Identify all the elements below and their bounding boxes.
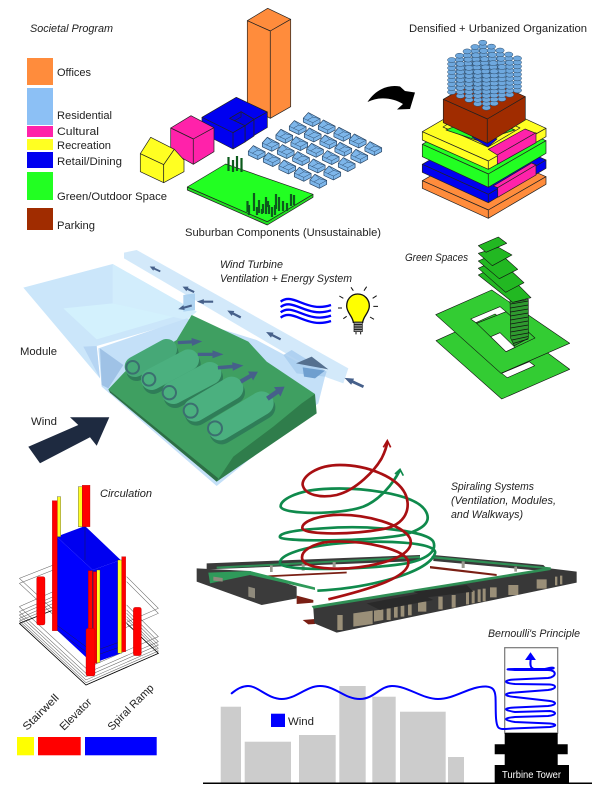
- label: stairwell: Stairwell: [21, 692, 62, 733]
- chart: bernoulli diagram: [203, 648, 592, 783]
- intake arrow: [343, 375, 365, 390]
- label: elevator: Elevator: [58, 696, 95, 733]
- orange layer: [422, 147, 546, 218]
- heading: spiraling systems: (Ventilation, Modules,: [451, 495, 556, 507]
- heading: spiraling systems: Spiraling Systems: [451, 481, 534, 493]
- icon: wind waves: [281, 299, 331, 323]
- arrow: wind: [28, 417, 109, 463]
- retail block: [202, 97, 267, 149]
- legend item: cultural: Cultural: [57, 126, 99, 138]
- legend item: offices: Offices: [57, 67, 91, 79]
- diagram: suburban components: [140, 8, 382, 225]
- diagram: green spaces: [436, 237, 570, 399]
- turbine vent: [296, 357, 328, 378]
- labels: circulation key: [17, 682, 157, 755]
- heading: densified organization: Densified + Urbanized Organization: [409, 23, 587, 35]
- heading: wind turbine: Wind Turbine: [220, 259, 283, 271]
- heading: green spaces: Green Spaces: [405, 252, 468, 264]
- ventilation duct: [124, 250, 348, 383]
- yellow and magenta layer: [422, 98, 546, 169]
- lower plane: [436, 314, 570, 399]
- duct arrows: [149, 264, 282, 342]
- city buildings: [221, 686, 464, 783]
- legend item: residential: [27, 88, 112, 125]
- legend item: green/outdoor space: Green/Outdoor Space: [57, 191, 167, 203]
- legend item: parking: Parking: [57, 220, 95, 232]
- legend item: retail/dining: Retail/Dining: [57, 156, 122, 168]
- legend: societal program: [27, 58, 167, 232]
- ground line: [203, 782, 592, 784]
- left wing: [197, 568, 315, 605]
- green space plane: [187, 164, 313, 225]
- diagram: spiraling systems: [197, 441, 577, 633]
- floor plates: [19, 565, 158, 685]
- turbine rollers: [126, 349, 263, 435]
- diagram: densified stack: [422, 40, 546, 218]
- legend item: residential: Residential: [57, 110, 112, 122]
- heading: societal program: Societal Program: [30, 23, 113, 35]
- wind legend: [271, 714, 314, 728]
- diagram: circulation: [19, 485, 158, 685]
- elevators: [37, 485, 141, 676]
- label: wind: Wind: [31, 416, 57, 428]
- stairwells: [57, 487, 122, 663]
- module shell: [23, 264, 325, 486]
- heading: spiraling systems: [451, 481, 556, 521]
- legend item: offices: [27, 58, 91, 85]
- legend item: recreation: [27, 139, 111, 152]
- back wings: [207, 555, 551, 577]
- walkway segments: [297, 596, 315, 624]
- front wing: [312, 567, 577, 633]
- upper plane: [436, 290, 570, 373]
- heading: spiraling systems: and Walkways): [451, 509, 523, 521]
- heading: wind turbine: Ventilation + Energy System: [220, 273, 352, 285]
- suburban houses: [248, 113, 382, 188]
- legend item: parking: [27, 208, 95, 232]
- label: spiral ramp: Spiral Ramp: [106, 682, 157, 733]
- parking block: [443, 77, 525, 143]
- caption: suburban components: Suburban Components (Unsustainable): [185, 227, 381, 239]
- arrow: curved black: [368, 86, 415, 110]
- green layer: [422, 111, 546, 187]
- legend item: recreation: Recreation: [57, 140, 111, 152]
- green terrain: [108, 315, 317, 482]
- wind legend: Wind: [288, 716, 314, 728]
- label: module: Module: [20, 346, 57, 358]
- recreation house: [140, 137, 184, 183]
- wind path: [232, 654, 555, 729]
- swatch: spiral ramp: [85, 737, 157, 755]
- offices tower: [247, 8, 291, 118]
- blue and magenta layer: [422, 131, 546, 203]
- legend item: retail/dining: [27, 152, 122, 168]
- legend item: cultural: [27, 126, 99, 138]
- red spiral: [302, 441, 411, 599]
- turbine tower: [495, 648, 569, 783]
- swatch: elevator: [38, 737, 81, 755]
- residential cylinders: [448, 40, 522, 110]
- airflow arrows on terrain: [178, 337, 288, 403]
- stacked green plates: [478, 237, 531, 302]
- legend item: green/outdoor space: [27, 172, 167, 203]
- spiral ramp core: [57, 526, 121, 663]
- tower core: [510, 299, 528, 346]
- courtyard opening: [477, 312, 535, 352]
- cultural block: [171, 116, 214, 164]
- turbine tower: Turbine Tower: [502, 770, 562, 781]
- heading: bernoulli's principle: Bernoulli's Principle: [488, 628, 580, 640]
- green spiral: [280, 469, 435, 591]
- icon: light bulb: [338, 287, 378, 334]
- heading: circulation: Circulation: [100, 488, 152, 500]
- swatch: stairwell: [17, 737, 34, 755]
- diagram: wind turbine module: [23, 250, 365, 486]
- heading: wind turbine: [220, 259, 352, 285]
- trees: [228, 156, 294, 217]
